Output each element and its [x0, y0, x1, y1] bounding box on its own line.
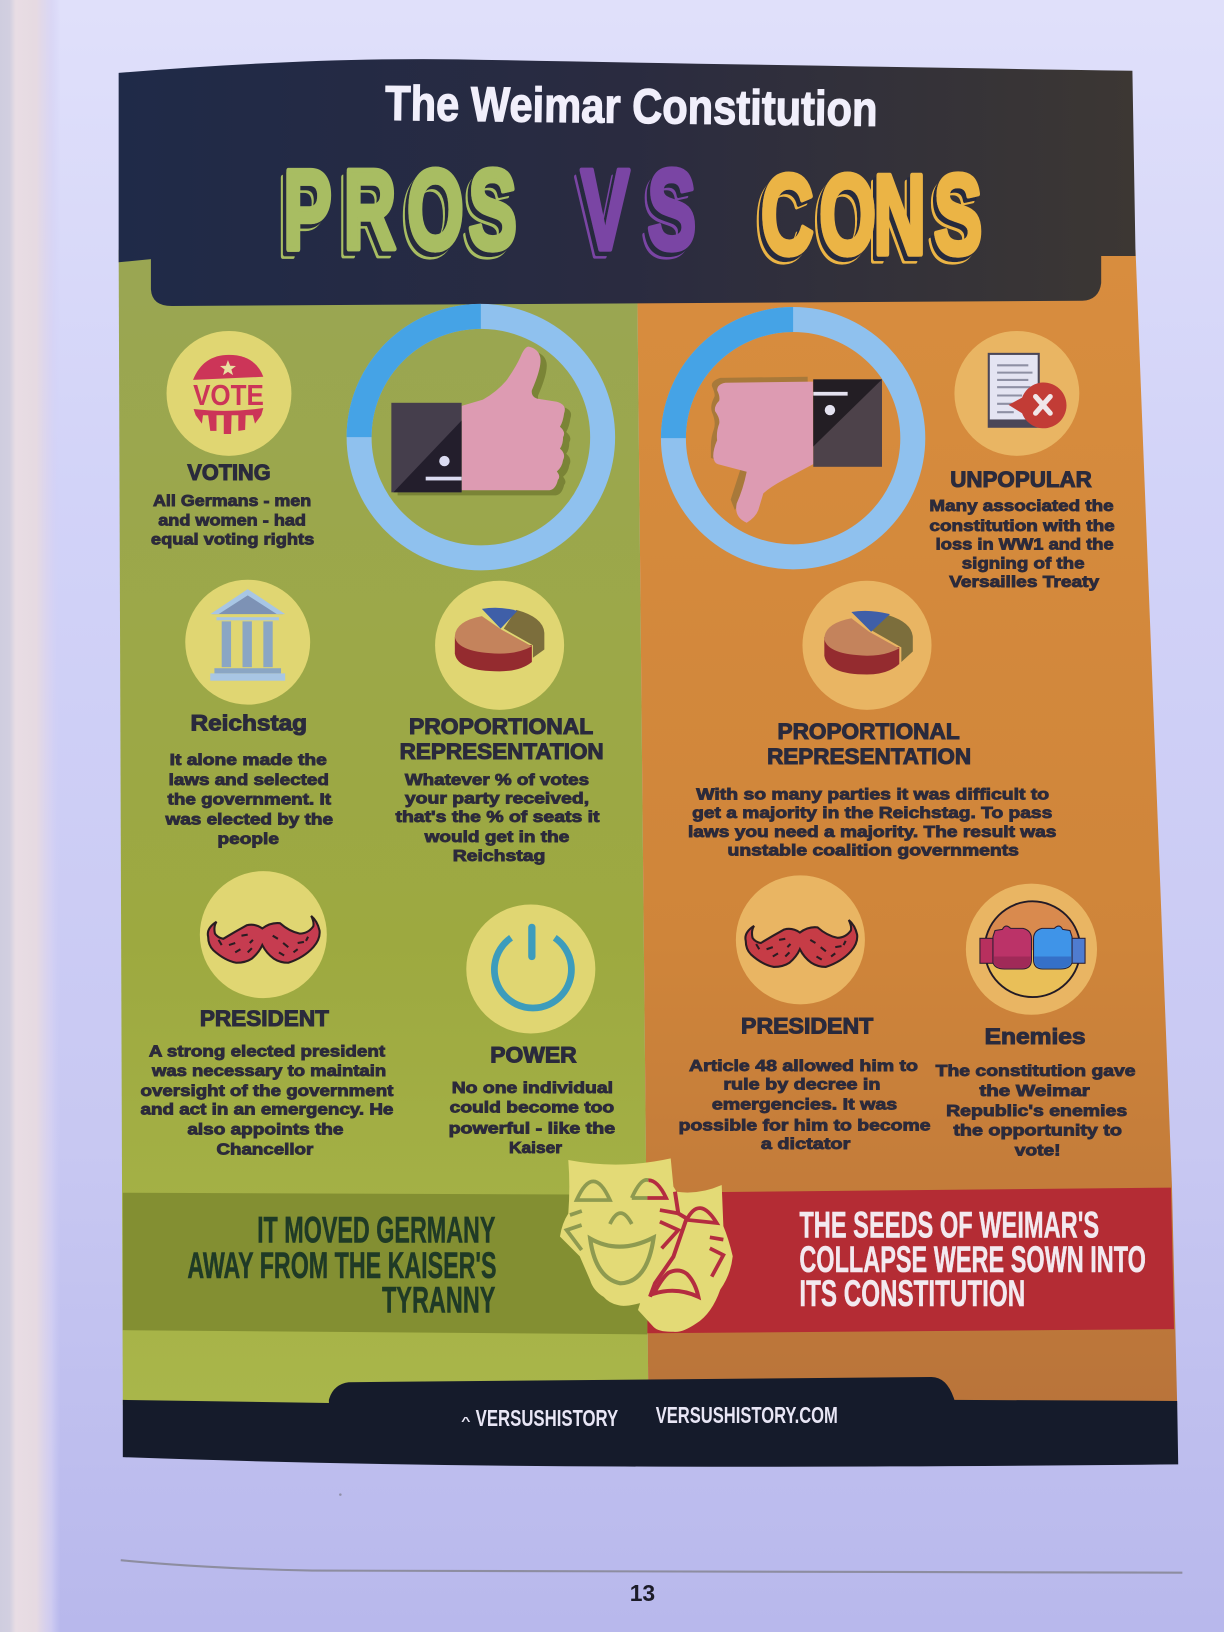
block: voting: [151, 460, 314, 548]
block: proportional representation pros: Whatever % of votes: [405, 771, 589, 789]
icon: reichstag building: [185, 580, 310, 705]
icon: power symbol: [466, 904, 595, 1034]
footer: social handle: [461, 1405, 618, 1431]
panel: cons background: [637, 250, 1177, 1405]
block: enemies: the Weimar: [979, 1082, 1091, 1100]
block: proportional representation cons: REPRESENTATION: [767, 744, 971, 769]
block: proportional representation cons: get a majority in the Reichstag. To pass: [692, 804, 1052, 822]
text: pros conclusion: [187, 1209, 496, 1320]
block: enemies: Republic's enemies: [946, 1102, 1127, 1120]
block: president pros: was necessary to maintain: [151, 1062, 386, 1080]
icon: moustache cons: [736, 875, 865, 1004]
icon: boxing gloves: [966, 884, 1097, 1015]
block: unpopular: loss in WW1 and the: [936, 536, 1114, 554]
block: reichstag: was elected by the: [164, 810, 333, 828]
block: unpopular: Versailles Treaty: [949, 573, 1099, 591]
footer: website: VERSUSHISTORY.COM: [656, 1402, 838, 1428]
block: enemies: The constitution gave: [936, 1062, 1136, 1080]
block: proportional representation pros: REPRESENTATION: [400, 739, 604, 764]
block: president pros: A strong elected president: [149, 1042, 386, 1060]
block: president cons: emergencies. It was: [712, 1096, 897, 1114]
text: cons conclusion: [799, 1204, 1146, 1314]
block: president cons: PRESIDENT: [741, 1014, 874, 1039]
block: proportional representation pros: that's the % of seats it: [396, 808, 600, 826]
text: pros conclusion: IT MOVED GERMANY: [257, 1209, 495, 1251]
heading: vs: VS: [581, 146, 696, 274]
banner: pros conclusion band: [123, 1193, 647, 1334]
block: proportional representation cons: [688, 719, 1056, 860]
chart: cons ring: [673, 320, 913, 557]
block: proportional representation pros: PROPORTIONAL: [409, 714, 593, 739]
block: proportional representation cons: laws you need a majority. The result was: [688, 823, 1056, 841]
block: president pros: and act in an emergency. He: [141, 1101, 393, 1119]
heading: cons: CONS: [761, 152, 983, 279]
block: president cons: Article 48 allowed him to: [689, 1057, 918, 1075]
panel: pros background: [119, 250, 648, 1405]
icon: thumbs down: [711, 377, 882, 523]
block: power: No one individual: [452, 1079, 613, 1097]
block: enemies: Enemies: [985, 1024, 1086, 1049]
block: power: could become too: [450, 1099, 614, 1117]
block: reichstag: It alone made the: [170, 751, 327, 769]
block: reichstag: Reichstag: [190, 711, 307, 736]
header panel: [119, 59, 1136, 306]
block: president pros: oversight of the government: [141, 1082, 394, 1100]
block: voting: VOTING: [187, 460, 271, 485]
icon: vote badge: [167, 331, 291, 456]
icon: moustache pros: [200, 871, 327, 998]
block: president cons: [679, 1014, 931, 1153]
footer: social handle: VERSUSHISTORY: [476, 1405, 618, 1431]
block: president pros: PRESIDENT: [200, 1006, 330, 1031]
block: power: POWER: [490, 1043, 577, 1068]
block: reichstag: laws and selected: [169, 771, 329, 789]
icon: theatre masks: [560, 1158, 733, 1332]
footer panel: [123, 1377, 1178, 1467]
block: power: powerful - like the: [449, 1119, 615, 1137]
block: president cons: a dictator: [761, 1135, 851, 1153]
heading: pros: PROS: [283, 146, 517, 274]
block: proportional representation cons: PROPORTIONAL: [777, 719, 960, 744]
block: enemies: [936, 1024, 1136, 1159]
block: enemies: the opportunity to: [953, 1122, 1122, 1140]
icon: pie chart cons: [802, 581, 932, 710]
text: cons conclusion: ITS CONSTITUTION: [799, 1272, 1025, 1314]
text: pros conclusion: AWAY FROM THE KAISER'S: [187, 1244, 496, 1286]
block: reichstag: people: [218, 830, 279, 848]
block: proportional representation pros: Reichstag: [453, 847, 545, 865]
footer: social handle: ^: [461, 1416, 471, 1428]
block: proportional representation pros: would get in the: [423, 828, 569, 846]
block: voting: and women - had: [158, 512, 306, 530]
block: unpopular: signing of the: [962, 554, 1085, 572]
icon: thumbs up: [391, 347, 571, 495]
block: unpopular: Many associated the: [929, 497, 1114, 515]
block: reichstag: [164, 711, 333, 848]
block: president pros: also appoints the: [187, 1120, 343, 1138]
block: proportional representation cons: unstable coalition governments: [728, 842, 1019, 860]
chart: pros ring: [359, 316, 603, 558]
block: power: Kaiser: [509, 1139, 563, 1157]
page number: 13: [630, 1580, 655, 1606]
block: president pros: [141, 1006, 394, 1158]
title: The Weimar Constitution: [385, 77, 878, 137]
block: power: [449, 1043, 615, 1157]
banner: cons conclusion band: [647, 1188, 1174, 1333]
block: proportional representation pros: your party received,: [405, 790, 589, 808]
block: unpopular: constitution with the: [929, 517, 1115, 535]
block: unpopular: [929, 467, 1115, 591]
block: president cons: possible for him to become: [679, 1116, 931, 1134]
block: enemies: vote!: [1015, 1141, 1061, 1159]
block: reichstag: the government. It: [168, 791, 332, 809]
icon: pie chart pros: [435, 581, 564, 710]
icon: unpopular document: [954, 331, 1079, 456]
block: proportional representation cons: With so many parties it was difficult to: [696, 785, 1049, 803]
block: president cons: rule by decree in: [723, 1076, 881, 1094]
block: voting: All Germans - men: [153, 492, 311, 510]
block: voting: equal voting rights: [151, 530, 314, 548]
block: president pros: Chancellor: [216, 1140, 314, 1158]
block: proportional representation pros: [396, 714, 604, 865]
block: unpopular: UNPOPULAR: [950, 467, 1092, 492]
text: pros conclusion: TYRANNY: [382, 1278, 495, 1320]
icon: vote badge: VOTE: [193, 380, 264, 412]
